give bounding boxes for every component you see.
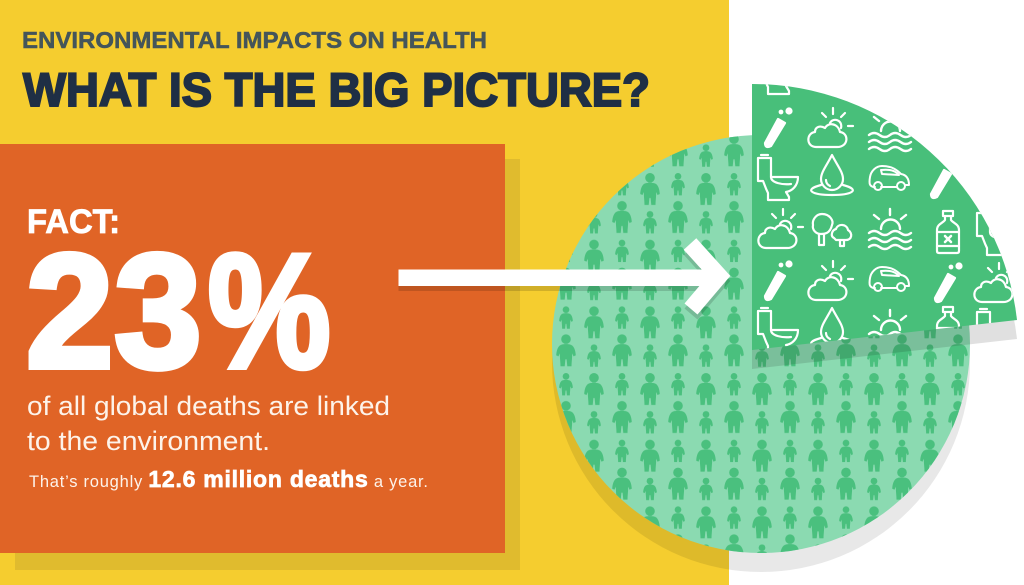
big number: 23 percent: % — [208, 220, 330, 401]
pie chart — [552, 49, 1019, 572]
icons: environmental factors — [756, 84, 1014, 348]
pie base circle with people pattern — [552, 135, 970, 553]
big number: 23 percent: 23 — [26, 221, 202, 402]
yellow background panel — [0, 0, 729, 585]
arrow from fact to wedge — [399, 244, 719, 314]
big number: 23 percent — [26, 220, 330, 402]
wedge shadow — [752, 103, 1017, 369]
subtitle: environmental impacts on health: ENVIRONMENTAL IMPACTS ON HEALTH — [22, 27, 487, 53]
text: deaths linked to environment — [27, 391, 390, 456]
text: deaths linked to environment: of all global deaths are linked — [27, 391, 390, 421]
wedge: 23 percent slice — [752, 84, 1017, 350]
label: fact: FACT: — [27, 203, 120, 241]
panel: fact card — [0, 144, 520, 570]
text: 12.6 million deaths a year: That’s roughly 12.6 million deaths a year. — [29, 466, 428, 492]
pie shadow — [552, 154, 970, 572]
title: what is the big picture: WHAT IS THE BIG PICTURE? — [23, 63, 650, 116]
text: deaths linked to environment: to the environment. — [27, 426, 270, 456]
